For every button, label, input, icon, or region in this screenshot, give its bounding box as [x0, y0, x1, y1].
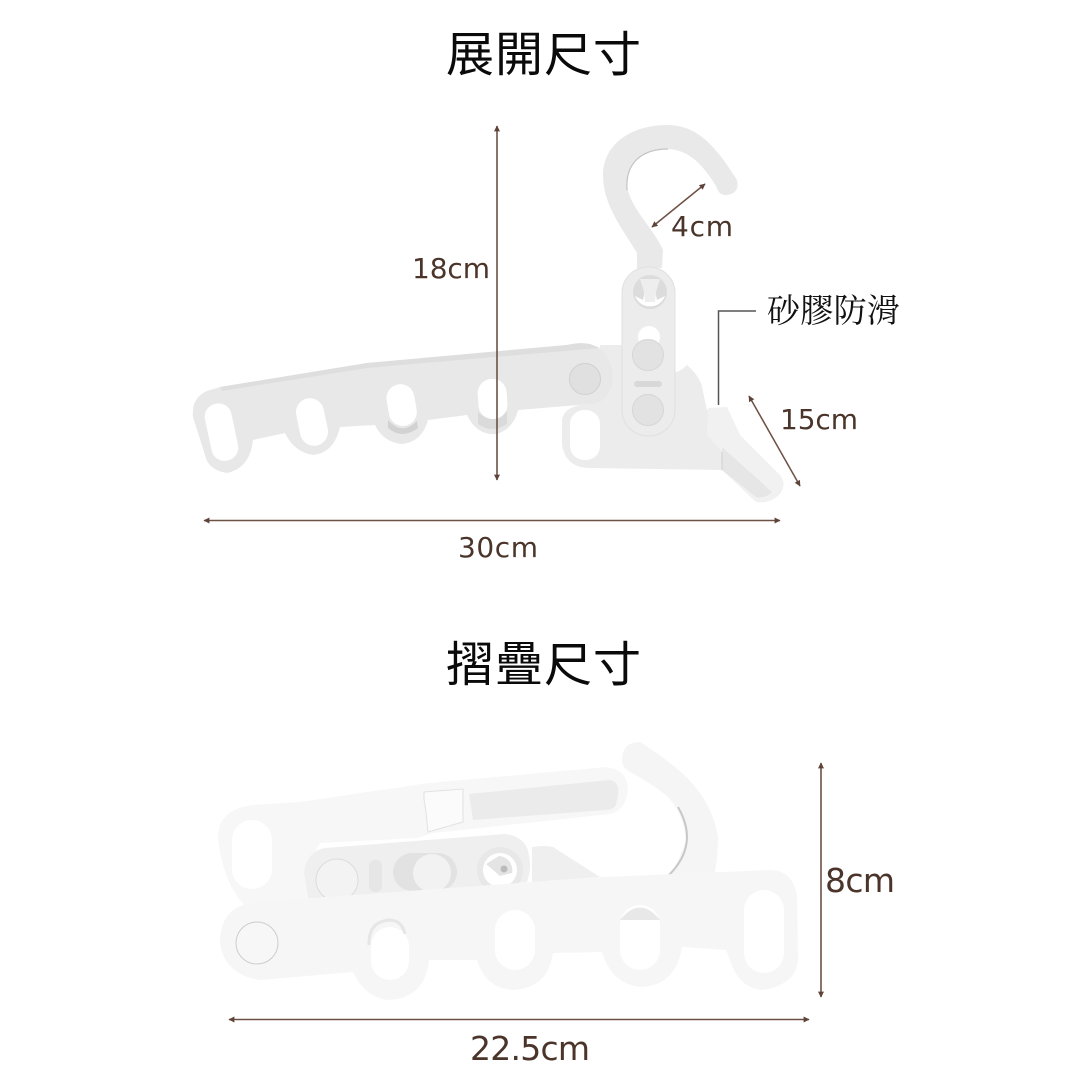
callout: silicone anti-slip: [718, 293, 900, 405]
arrow: height 18cm: [496, 126, 498, 480]
label: 18cm: 18cm: [412, 252, 490, 285]
arrow: height 8cm: [820, 763, 822, 997]
title: unfolded size: 展開尺寸: [446, 29, 641, 82]
lower long arm with holes: [220, 870, 798, 1000]
arrow: hook 4cm: [652, 184, 705, 227]
arrow: width 22.5cm: [229, 1018, 809, 1020]
label: 4cm: 4cm: [671, 210, 733, 243]
hanger: folded: [218, 742, 798, 1000]
upper clip arm: [218, 767, 628, 905]
middle plate with buttons: [304, 834, 530, 901]
label: 22.5cm: 22.5cm: [470, 1029, 590, 1068]
arrow: width 30cm: [204, 520, 780, 522]
rear body with lower lobe and clip: [562, 345, 784, 502]
hanger: unfolded: [193, 125, 784, 502]
long arm with holes: [193, 343, 613, 473]
swivel hook: [603, 125, 738, 268]
pivot plate with buttons: [622, 267, 675, 436]
callout: silicone anti-slip: 砂膠防滑: [767, 293, 900, 330]
wedge behind plate: [532, 846, 600, 882]
title: folded size: 摺疊尺寸: [446, 639, 641, 692]
folded hook: [622, 742, 718, 878]
label: 30cm: 30cm: [458, 531, 538, 564]
arrow: clip 15cm: [749, 396, 800, 486]
label: 8cm: 8cm: [825, 861, 895, 900]
label: 15cm: 15cm: [780, 403, 858, 436]
